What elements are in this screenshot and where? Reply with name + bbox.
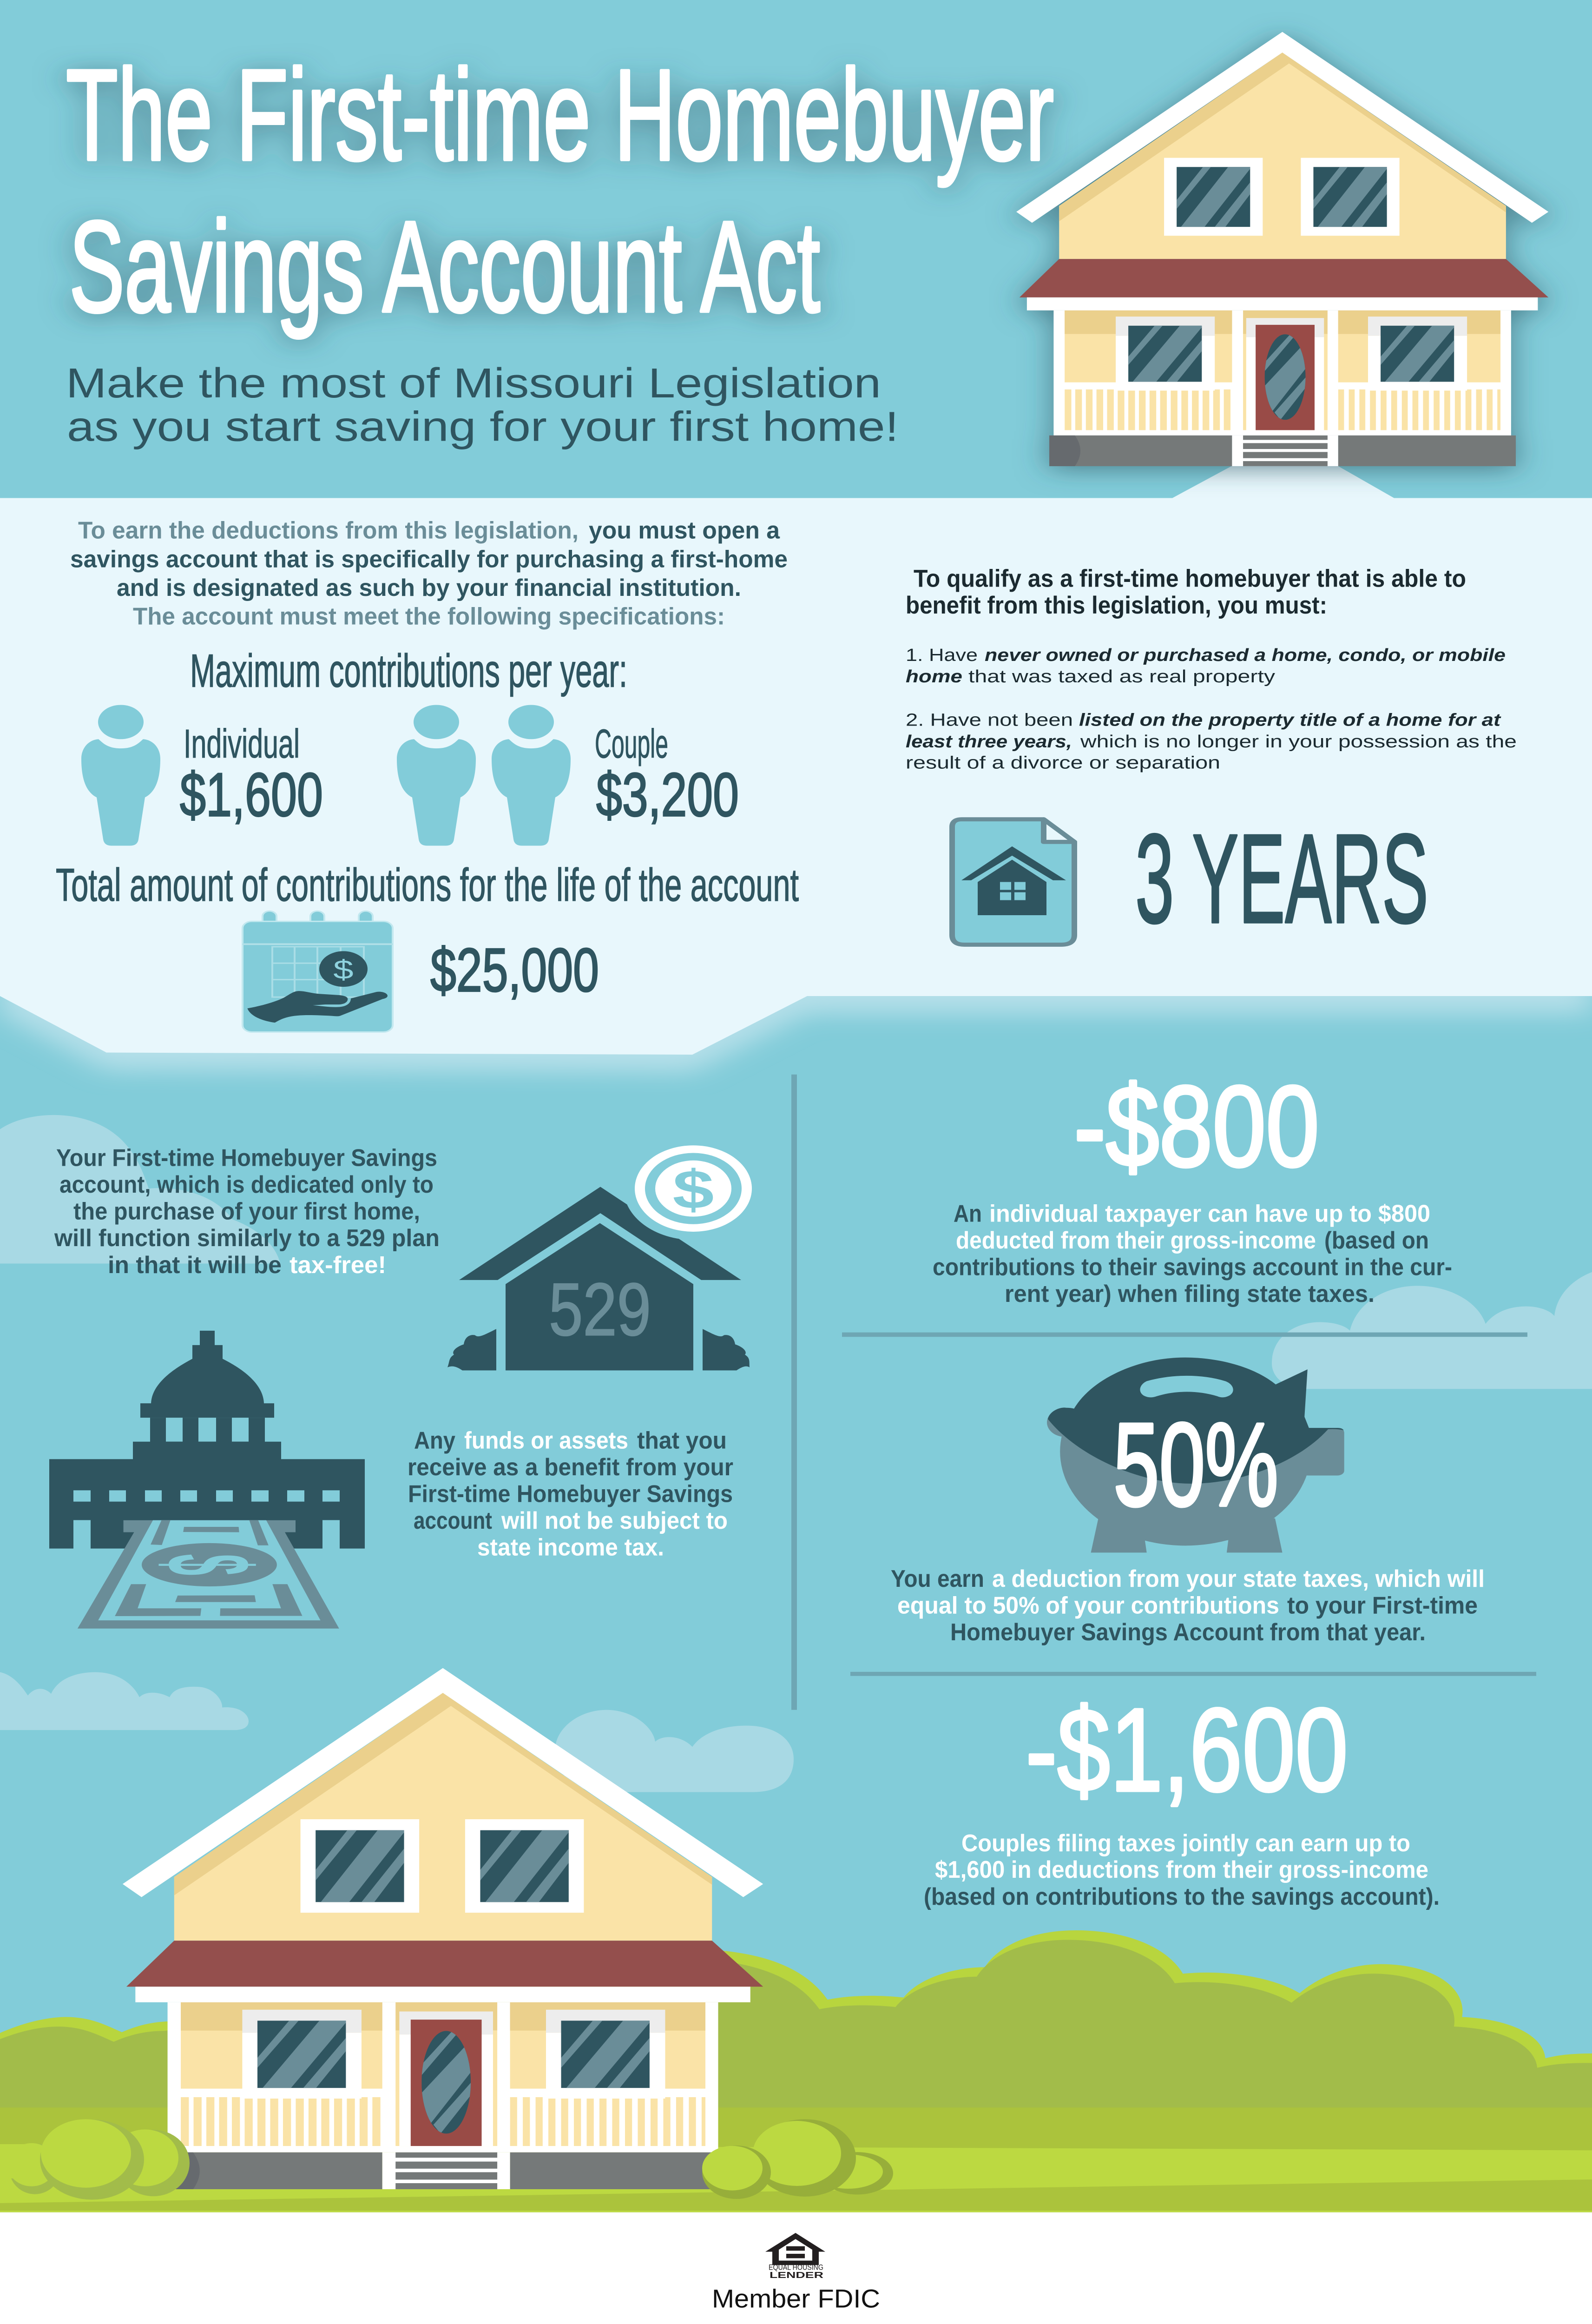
icon: dollar bill path — [78, 1520, 339, 1629]
divider: lower horizontal — [850, 1672, 1536, 1676]
cloud: behind lower house — [555, 1710, 794, 1792]
icon: couple — [397, 705, 571, 845]
label: individual amount — [180, 721, 323, 829]
text: Maximum contributions per year: — [190, 645, 627, 697]
icon: dollar bill path: $ — [142, 1554, 275, 1575]
glow below light panel — [0, 959, 1592, 1072]
text block: earning the deductions: savings account that is specifically for purchasing a first-home — [70, 546, 788, 573]
text block: individual deduction: An — [954, 1200, 982, 1227]
text block: 50 percent deduction: to your First-time — [1287, 1592, 1478, 1619]
text block: requirement 2: result of a divorce or separation — [906, 753, 1220, 772]
text block: requirement 2: 2. Have not been — [906, 710, 1073, 730]
big stat: minus 1600 dollars: -$1,600 — [1026, 1684, 1348, 1816]
text block: requirement 1 — [906, 645, 1506, 686]
text block: requirement 2: least three years, — [906, 732, 1072, 751]
panel: light information section — [0, 466, 1592, 1055]
house illustration: bottom — [123, 1668, 763, 2189]
icon: 529 house with coin: 529 — [549, 1268, 651, 1351]
text block: qualifications heading: benefit from this legislation, you must: — [906, 592, 1327, 619]
text: Total amount of contributions for the life of the account — [56, 859, 799, 911]
label: individual amount: Individual — [184, 721, 300, 766]
icon: calendar with coin and hand — [243, 911, 393, 1032]
bushes: left — [0, 2119, 190, 2199]
text block: 529 plan — [54, 1144, 440, 1279]
icon: 529 house with coin: $ — [673, 1159, 714, 1220]
text block: state income tax — [408, 1427, 733, 1561]
text block: 529 plan: tax-free! — [289, 1252, 386, 1279]
ground — [0, 2107, 1592, 2212]
icon: calendar with coin and hand: $ — [333, 954, 354, 984]
hedge — [0, 1930, 1592, 2122]
text block: earning the deductions: you must open a — [589, 517, 780, 544]
text: member FDIC: Member FDIC — [712, 2284, 880, 2313]
cloud: lower left — [0, 1672, 249, 1730]
text block: 50 percent deduction — [891, 1565, 1485, 1646]
text block: 529 plan: account, which is dedicated only to — [59, 1171, 434, 1198]
cloud: right — [1272, 1272, 1592, 1389]
divider: vertical — [791, 1075, 797, 1710]
text block: requirement 2: listed on the property title of a home for at — [1079, 710, 1501, 730]
icon: individual person — [81, 705, 160, 845]
text block: state income tax: that you — [637, 1427, 727, 1454]
subtitle: Make the most of Missouri Legislation — [66, 359, 881, 406]
label: individual amount: $1,600 — [180, 760, 323, 829]
icon: equal housing lender — [765, 2233, 825, 2280]
text block: couples deduction — [924, 1830, 1440, 1910]
text block: requirement 2 — [906, 710, 1517, 772]
cloud: upper left — [0, 1115, 280, 1263]
amount: lifetime contributions: $25,000 — [430, 936, 599, 1004]
text block: 529 plan: the purchase of your first home, — [73, 1198, 420, 1225]
text block: requirement 1: home — [906, 667, 962, 686]
text block: 529 plan: in that it will be — [108, 1252, 282, 1279]
text block: earning the deductions: To earn the deductions from this legislation, — [78, 517, 579, 544]
text block: requirement 1: that was taxed as real property — [968, 667, 1275, 686]
text block: state income tax: receive as a benefit from your — [408, 1454, 733, 1481]
text block: state income tax: state income tax. — [477, 1534, 664, 1561]
icon: equal housing lender: EQUAL HOUSING — [769, 2264, 823, 2272]
icon: piggy bank with 50 percent — [1047, 1357, 1344, 1552]
big stat: minus 800 dollars: -$800 — [1074, 1063, 1319, 1190]
label: couple amount — [595, 721, 739, 829]
icon: property title document — [952, 819, 1074, 944]
label: couple amount: Couple — [595, 721, 668, 766]
text block: state income tax: funds or assets — [464, 1427, 628, 1454]
text block: 50 percent deduction: You earn — [891, 1565, 984, 1592]
text block: earning the deductions — [70, 517, 788, 630]
title — [66, 43, 1054, 340]
icon: 529 house with coin — [447, 1137, 763, 1370]
label: couple amount: $3,200 — [596, 760, 739, 829]
text block: individual deduction: (based on — [1324, 1227, 1429, 1254]
text block: individual deduction — [933, 1200, 1452, 1307]
footer panel — [0, 2212, 1592, 2324]
text block: state income tax: First-time Homebuyer Savings — [408, 1480, 733, 1507]
text block: individual deduction: deducted from their gross-income — [956, 1227, 1316, 1254]
subtitle: as you start saving for your first home! — [67, 403, 899, 450]
text block: 50 percent deduction: equal to 50% of your contributions — [897, 1592, 1279, 1619]
text block: requirement 1: never owned or purchased a home, condo, or mobile — [985, 645, 1506, 665]
icon: piggy bank with 50 percent: 50% — [1113, 1399, 1278, 1531]
text block: state income tax: Any — [414, 1427, 455, 1454]
text block: 529 plan: will function similarly to a 529 plan — [54, 1225, 440, 1252]
icon: equal housing lender: LENDER — [770, 2270, 823, 2280]
text block: 529 plan: Your First-time Homebuyer Savings — [56, 1144, 437, 1171]
subtitle — [66, 359, 899, 450]
text block: state income tax: will not be subject to — [501, 1507, 728, 1534]
house illustration: top — [1016, 32, 1548, 466]
text block: state income tax: account — [414, 1507, 492, 1534]
text block: earning the deductions: The account must meet the following specifications: — [133, 603, 725, 630]
text block: earning the deductions: and is designated as such by your financial institution. — [117, 574, 741, 601]
text block: requirement 1: 1. Have — [906, 645, 978, 665]
text block: individual deduction: rent year) when filing state taxes. — [1005, 1281, 1375, 1307]
bushes: right — [702, 2119, 893, 2199]
divider: upper horizontal — [842, 1333, 1527, 1337]
text block: requirement 2: which is no longer in your possession as the — [1080, 732, 1517, 751]
text block: qualifications heading — [906, 565, 1466, 619]
icon: state capitol building — [49, 1331, 365, 1549]
